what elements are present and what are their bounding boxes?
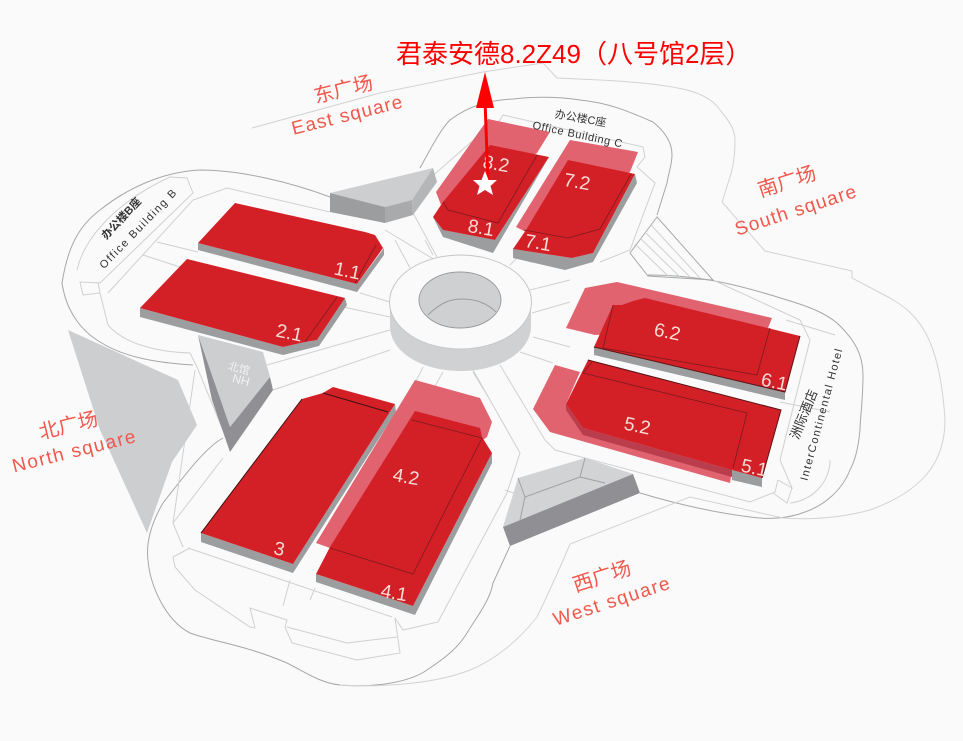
label: North square: 北广场	[37, 407, 100, 444]
arrow: location pointer	[476, 72, 494, 182]
label: West square: 西广场	[570, 557, 634, 597]
icon: white star marker	[473, 171, 497, 195]
label: East square: 东广场	[312, 71, 375, 108]
label: Office Building C: Office Building C	[531, 120, 624, 150]
label 5.2: 5.2	[622, 414, 652, 440]
label 7.1: 7.1	[523, 231, 553, 256]
label 3: 3	[272, 538, 287, 561]
label: North square: North square	[10, 426, 139, 477]
hall 7	[513, 140, 638, 270]
building: north hall NH	[198, 335, 273, 452]
label: Office Building B: 办公楼B座	[98, 194, 144, 242]
label: West square: West square	[551, 573, 674, 631]
title: booth location: 君泰安德8.2Z49（八号馆2层）	[396, 39, 751, 69]
hall 8	[433, 119, 550, 253]
label 8.2: 8.2	[481, 152, 511, 177]
label 2.1: 2.1	[274, 321, 304, 347]
building: east grey block	[330, 168, 437, 223]
building: west grey block	[503, 458, 640, 546]
venue outline	[62, 63, 945, 686]
label 8.1: 8.1	[466, 216, 496, 241]
label: Office Building C: 办公楼C座	[554, 107, 607, 129]
label: NH: 北馆	[227, 359, 251, 378]
label 6.1: 6.1	[759, 370, 789, 396]
plaza block: north square	[68, 330, 197, 533]
label 1.1: 1.1	[332, 259, 362, 285]
hall 3	[201, 387, 396, 573]
label 7.2: 7.2	[562, 170, 592, 195]
label: InterContinental Hotel: InterContinental Hotel	[799, 346, 846, 482]
stairs: south hatch	[630, 217, 713, 280]
label 4.2: 4.2	[391, 465, 421, 490]
label: East square: East square	[290, 92, 406, 140]
hall 6	[566, 282, 800, 400]
label: South square: South square	[732, 181, 860, 240]
hall 2.1	[140, 259, 347, 355]
label 5.1: 5.1	[739, 456, 769, 482]
hall 1.1	[198, 203, 384, 292]
label: South square: 南广场	[755, 162, 819, 202]
hall 5	[533, 360, 781, 487]
building: north hall NH: NH	[231, 371, 251, 389]
central ring	[390, 255, 532, 371]
label 4.1: 4.1	[379, 581, 409, 606]
label: Office Building B: Office Building B	[97, 186, 180, 271]
label: InterContinental Hotel: 洲际酒店	[787, 387, 821, 441]
hall 4	[316, 380, 492, 615]
label 6.2: 6.2	[652, 320, 682, 346]
